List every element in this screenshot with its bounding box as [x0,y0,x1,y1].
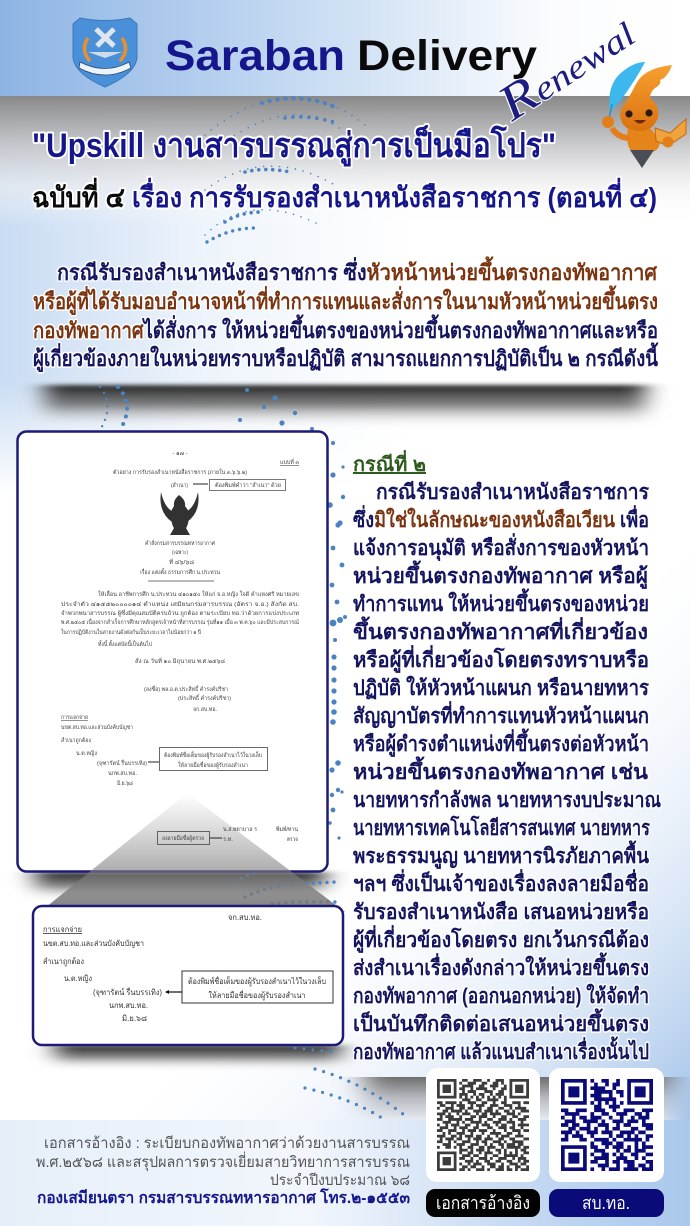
document text: ที่ ๔๖/๖๘ [169,558,195,566]
panel: enlarged detail: จก.สบ.ทอ. [228,913,262,922]
document text: ให้เลื่อน อาชีพการศึก น.ประทวน ๔๑๐๑๕๐ ให้แก่ จ.อ.หญิง ใจดี คำแหงศรี หมายเลข [98,590,299,598]
document text: สั่ง ณ วันที่ ๑๐ มิถุนายน พ.ศ.๒๕๖๘ [135,657,226,665]
document text: ตัวอย่าง การรับรองสำเนาหนังสือราชการ (ภายใน ๓.๖.๖.๒) [113,468,247,476]
document text: สำเนาถูกต้อง [61,737,91,744]
document text: พ.ศ.๒๕๐๕ เนื่องจากสำเร็จการศึกษาหลักสูตรเจ้าหน้าที่สารบรรณ รุ่นที่๑๑ เมื่อ ๓ พ.ค.๖๐ และมีประสบการณ์ [61,617,300,626]
QR card: air force [549,1068,664,1182]
case 2 text column: ผู้ที่เกี่ยวข้องโดยตรง ยกเว้นกรณีต้อง [353,924,649,954]
case 2 text column: กรณีรับรองสำเนาหนังสือราชการ [376,480,650,504]
main heading [32,124,657,213]
footer reference text: พ.ศ.๒๕๖๘ และสรุปผลการตรวจเยี่ยมสายวิทยาการสารบรรณ [36,1151,410,1172]
sample label on triangle: ลงลายมือชื่อผู้ตรวจ [162,834,204,842]
document text: นกพ.สบ.ทอ. [108,770,137,777]
main heading: "Upskill งานสารบรรณสู่การเป็นมือโปร" [32,124,556,167]
panel: enlarged detail: นขต.สบ.ทอ.และส่วนบังคับบัญชา [43,939,144,948]
case 2 text column: แจ้งการอนุมัติ หรือสั่งการของหัวหน้า [353,532,649,562]
panel: enlarged detail: สำเนาถูกต้อง [43,957,84,967]
case 2 text column: พระธรรมนูญ นายทหารนิรภัยภาคพื้น [353,840,650,870]
header title: Saraban [165,32,345,80]
case 2 text column: ทำการแทน ให้หน่วยขึ้นตรงของหน่วย [353,588,649,616]
document text [61,451,300,787]
sample label on triangle: ร.ท. [223,836,233,843]
button: air force directorate: สบ.ทอ. [582,1193,630,1213]
document text: ให้ลายมือชื่อของผู้รับรองสำเนา [178,761,248,769]
case 2 text column: เป็นบันทึกติดต่อเสนอหน่วยขึ้นตรง [353,1008,649,1036]
case 2 text column [353,480,661,1064]
case 2 text column: สัญญาบัตรที่ทำการแทนหัวหน้าแผนก [353,700,649,729]
panel: enlarged detail: (จุฑารัตน์ รื่นบรรเทิง) [93,986,162,997]
case 2 text column: หรือผู้ที่เกี่ยวข้องโดยตรงทราบหรือ [353,644,649,674]
case 2 text column: ส่งสำเนาเรื่องดังกล่าวให้หน่วยขึ้นตรง [353,952,649,980]
panel: enlarged detail: การแจกจ่าย [43,925,82,934]
renewal script: Renewal [486,3,644,132]
main heading: ฉบับที่ ๔ เรื่อง การรับรองสำเนาหนังสือราชการ (ตอนที่ ๔) [32,177,657,213]
sample label on triangle [158,825,298,844]
document text: จก.สบ.ทอ. [193,706,217,713]
document text: - ๑๗ - [172,451,188,457]
panel: document sample [18,432,328,872]
document text: (ประสิทธิ์ คำรงค์ปรีชา) [178,693,231,702]
header title [165,32,537,80]
case 2 text column: หน่วยขึ้นตรงกองทัพอากาศ เช่น [353,756,649,784]
document text: การแจกจ่าย [61,714,88,721]
document text: (สำเนา) [171,482,188,489]
panel: enlarged detail: ต้องพิมพ์ชื่อเต็มของผู้รับรองสำเนาไว้ในวงเล็บ [188,975,326,987]
case 2 text column: ปฏิบัติ ให้หัวหน้าแผนก หรือนายทหาร [353,675,650,700]
document text: (จุฑารัตน์ รื่นบรรเทิง) [97,759,147,767]
QR card: reference document [426,1068,540,1182]
document text: มิ.ย.๖๘ [117,780,133,787]
icon: air force emblem shield [73,18,137,87]
button: reference document [426,1189,540,1217]
case 2 heading: กรณีที่ ๒ [353,449,426,476]
document text: แบบที่ ๓ [280,458,299,466]
case 2 text column: รับรองสำเนาหนังสือ เสนอหน่วยหรือ [353,900,649,924]
document text: ในการปฏิบัติงานในสายงานดังต่อกันเป็นระยะเวลาไม่น้อยกว่า ๑ ปี [61,627,201,636]
header title: Delivery [357,32,537,80]
document text: เรื่อง แต่งตั้ง ธรรมการศึก น.ประทวน [140,567,220,576]
document text: คำสั่งกรมสารบรรณทหารอากาศ [145,539,215,547]
icon: garuda emblem [160,492,199,535]
sample label on triangle: พิมพ์/ทาน [276,825,298,833]
intro paragraph: กรณีรับรองสำเนาหนังสือราชการ ซึ่งหัวหน้าหน่วยขึ้นตรงกองทัพอากาศ [57,256,658,285]
document text: ต้องพิมพ์ชื่อเต็มของผู้รับรองสำเนาไว้ในวงเล็บ [164,750,262,759]
icon: mascot with quill and book [602,62,686,168]
case 2 text column: ขึ้นตรงกองทัพอากาศที่เกี่ยวข้อง [353,616,648,644]
footer reference text [36,1135,410,1207]
document text: (ลงชื่อ) พล.อ.ต.ประสิทธิ์ คำรงค์ปรีชา [144,684,228,693]
document text: ต้องพิมพ์คำว่า "สำเนา" ด้วย [215,481,281,489]
panel: enlarged detail [33,906,343,1045]
footer reference text: กองเสมียนตรา กรมสารบรรณทหารอากาศ โทร.๒-๑๕๕๓ [37,1187,410,1207]
document text: ทั้งนี้ ตั้งแต่บัดนี้เป็นต้นไป [98,639,152,648]
footer reference text: เอกสารอ้างอิง : ระเบียบกองทัพอากาศว่าด้วยงานสารบรรณ [44,1135,410,1152]
case 2 text column: ฯลฯ ซึ่งเป็นเจ้าของเรื่องลงลายมือชื่อ [353,868,649,896]
panel: enlarged detail: ให้ลายมือชื่อของผู้รับรองสำเนา [208,989,306,1001]
case 2 text column: หน่วยขึ้นตรงกองทัพอากาศ หรือผู้ [353,560,648,590]
panel: enlarged detail: มิ.ย.๖๘ [122,1014,147,1023]
dotted arcs decoration [100,97,408,1118]
document text: จำพวกพนาสารบรรณ ผู้ซึ่งมีคุณสมบัติครบถ้วน ถูกต้อง ตามระเบียบ ทอ.ว่าด้วยการแบ่งประเภท [61,609,299,617]
intro paragraph [33,256,659,373]
document text: ประจำตัว ๔๑๕๕๒๐๐๐๐๑๔ ตำแหน่ง เสมียนกรมสารบรรณ (อัตรา จ.อ.) สังกัด สบ. [61,600,299,608]
footer reference text: ประจำปีงบประมาณ ๖๘ [270,1172,410,1189]
sample label on triangle: น.ส.พยาบาล ร [223,826,257,833]
document text: (เฉพาะ) [172,549,188,556]
case 2 text column: ซึ่งมิใช่ในลักษณะของหนังสือเวียน เพื่อ [353,504,649,532]
document text: นขต.สบ.ทอ.และส่วนบังคับบัญชา [61,723,133,731]
button: reference document: เอกสารอ้างอิง [436,1193,530,1213]
sample label on triangle: ตรวจ [287,836,298,843]
panel: enlarged detail: นกพ.สบ.ทอ. [109,1001,148,1010]
panel: enlarged detail: น.ต.หญิง [64,974,92,983]
zoom triangle [40,793,345,912]
case 2 text column: หรือผู้ดำรงตำแหน่งที่ขึ้นตรงต่อหัวหน้า [353,728,649,758]
document text: น.ต.หญิง [76,750,97,757]
button: air force directorate [549,1189,664,1217]
